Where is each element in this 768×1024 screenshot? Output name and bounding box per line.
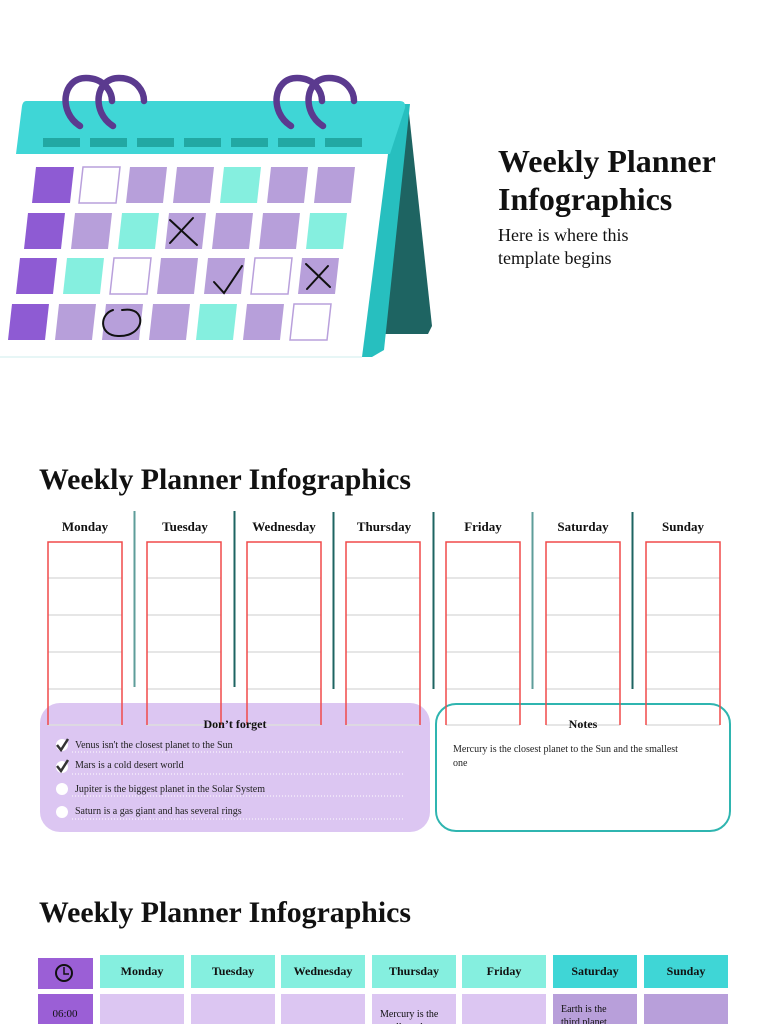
- section 2 title: Weekly Planner Infographics: [39, 463, 411, 496]
- notes text: [453, 744, 678, 769]
- day headings: Saturday: [557, 519, 609, 534]
- day headings: Tuesday: [162, 519, 208, 534]
- header cells: Sunday: [667, 964, 705, 978]
- subtitle: template begins: [498, 248, 611, 268]
- day headings: [62, 519, 704, 534]
- item 2 checked: [56, 760, 404, 774]
- day headings: Sunday: [662, 519, 704, 534]
- header slots: [43, 138, 362, 147]
- notes text: Mercury is the closest planet to the Sun and the smallest: [453, 744, 678, 755]
- header cells: Thursday: [389, 964, 439, 978]
- panel: notes: [436, 704, 730, 831]
- column dividers: [134, 511, 632, 689]
- item 2 checked: Mars is a cold desert world: [75, 760, 184, 771]
- icon: clock: [38, 958, 93, 989]
- notes heading: Notes: [569, 717, 598, 731]
- header cells: [100, 955, 728, 988]
- teal side edge: [360, 104, 410, 357]
- header cells: Friday: [487, 964, 521, 978]
- item 3: [56, 783, 404, 796]
- item 4: [56, 806, 404, 819]
- subtitle: Here is where this: [498, 225, 628, 245]
- day boxes: [48, 542, 720, 725]
- item 1 checked: Venus isn't the closest planet to the Sun: [75, 740, 233, 751]
- don't forget heading: Don’t forget: [204, 717, 266, 731]
- item 4: Saturn is a gas giant and has several rings: [75, 806, 242, 817]
- panel: don't forget: [40, 703, 430, 832]
- checklist: [56, 739, 404, 819]
- 06:00 row: Earth is the: [561, 1004, 607, 1015]
- header cells: Tuesday: [212, 964, 254, 978]
- day headings: Thursday: [357, 519, 412, 534]
- marks: [103, 218, 330, 336]
- day headings: Friday: [464, 519, 502, 534]
- 06:00 row: 06:00: [52, 1008, 78, 1020]
- header cells: Monday: [121, 964, 163, 978]
- day headings: Monday: [62, 519, 109, 534]
- header bar: [16, 101, 405, 154]
- rings: [66, 78, 354, 126]
- top title: Infographics: [498, 181, 672, 217]
- item 3: Jupiter is the biggest planet in the Solar System: [75, 784, 265, 795]
- stand back: [372, 104, 432, 334]
- grid cells: [8, 167, 355, 340]
- schedule table: [38, 955, 728, 1024]
- section 3 title: Weekly Planner Infographics: [39, 896, 411, 929]
- item 1 checked: [56, 739, 404, 752]
- sheet: [0, 154, 388, 357]
- calendar illustration: [0, 78, 432, 357]
- subtitle: [498, 225, 628, 268]
- header cells: Saturday: [571, 964, 619, 978]
- day headings: Wednesday: [252, 519, 316, 534]
- header cells: Wednesday: [294, 964, 352, 978]
- 06:00 row: Mercury is the: [380, 1009, 439, 1020]
- 06:00 row: [38, 994, 728, 1024]
- notes text: one: [453, 758, 468, 769]
- top title: [498, 143, 716, 217]
- top title: Weekly Planner: [498, 143, 716, 179]
